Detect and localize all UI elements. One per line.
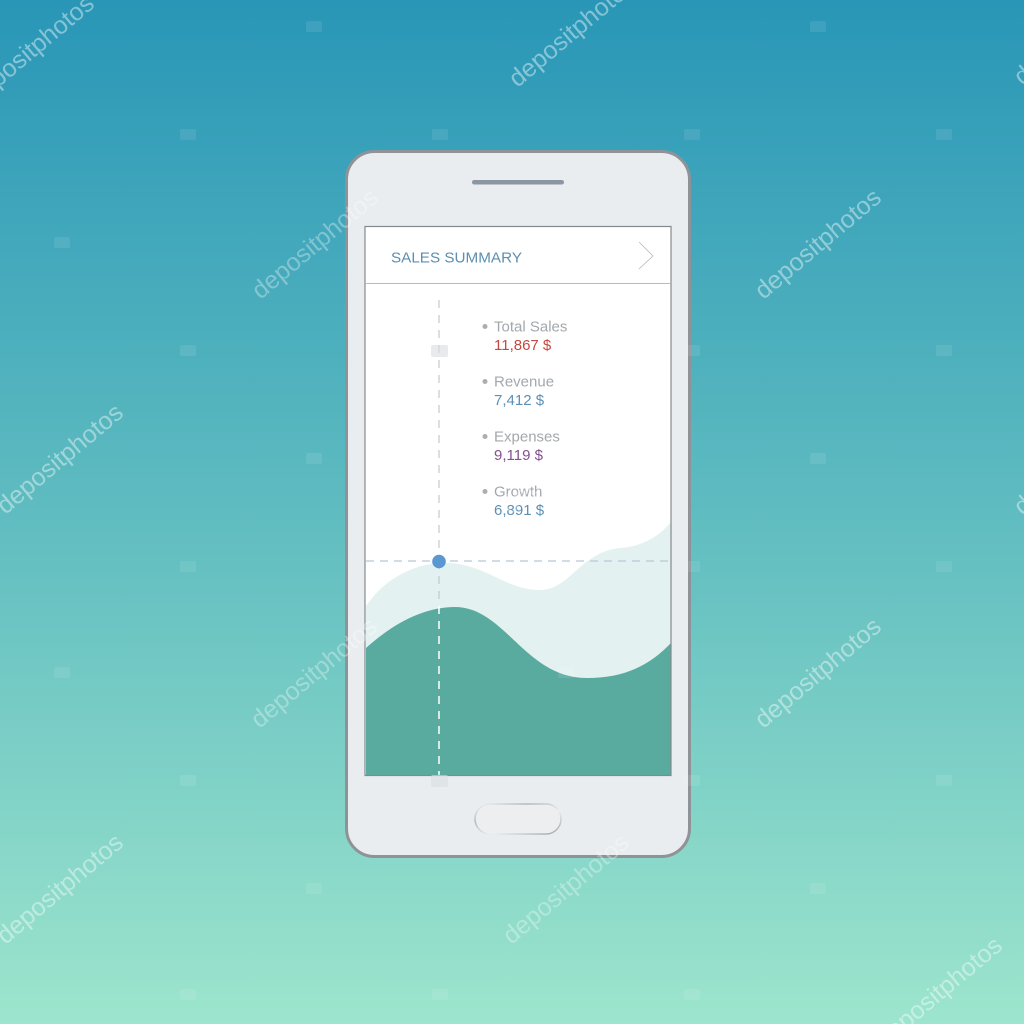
metric: expenses <box>482 428 560 464</box>
chevron arrow icon <box>639 242 653 269</box>
metric: growth: Growth <box>494 484 542 500</box>
screen frame <box>365 226 671 776</box>
watermark text over the phone <box>245 183 635 950</box>
metric: expenses: 9,119 $ <box>494 447 544 464</box>
metric: expenses: Expenses <box>494 428 560 446</box>
camera marks on the phone face <box>431 345 448 787</box>
header divider <box>366 283 671 284</box>
data point marker <box>432 555 446 568</box>
metric: total sales <box>482 318 567 354</box>
metric: growth <box>482 484 545 519</box>
metric: revenue: 7,412 $ <box>494 392 545 409</box>
watermark text over the phone: depositphotos <box>246 183 384 305</box>
metric: total sales: 11,867 $ <box>494 337 552 354</box>
watermark text over the phone: depositphotos <box>245 612 383 734</box>
stock watermark text: depositphotos <box>749 183 887 305</box>
horizontal dashed guide <box>366 560 671 562</box>
metric: growth: 6,891 $ <box>494 502 545 519</box>
header title: SALES SUMMARY <box>391 250 522 266</box>
watermark text over the phone: depositphotos <box>497 828 635 950</box>
screen <box>365 226 671 776</box>
metric: revenue: Revenue <box>494 374 554 390</box>
vertical dashed guide <box>438 300 440 775</box>
area chart: light series <box>366 522 671 775</box>
speaker <box>472 180 564 184</box>
metric: revenue <box>482 374 554 409</box>
stock watermark text: depositphotos <box>749 612 887 734</box>
watermark text over the phone: depositphotos <box>496 398 634 520</box>
home button <box>475 804 561 834</box>
screen background <box>365 226 671 776</box>
phone body <box>346 152 690 856</box>
area chart: dark series <box>366 607 671 775</box>
metric: total sales: Total Sales <box>494 318 567 336</box>
